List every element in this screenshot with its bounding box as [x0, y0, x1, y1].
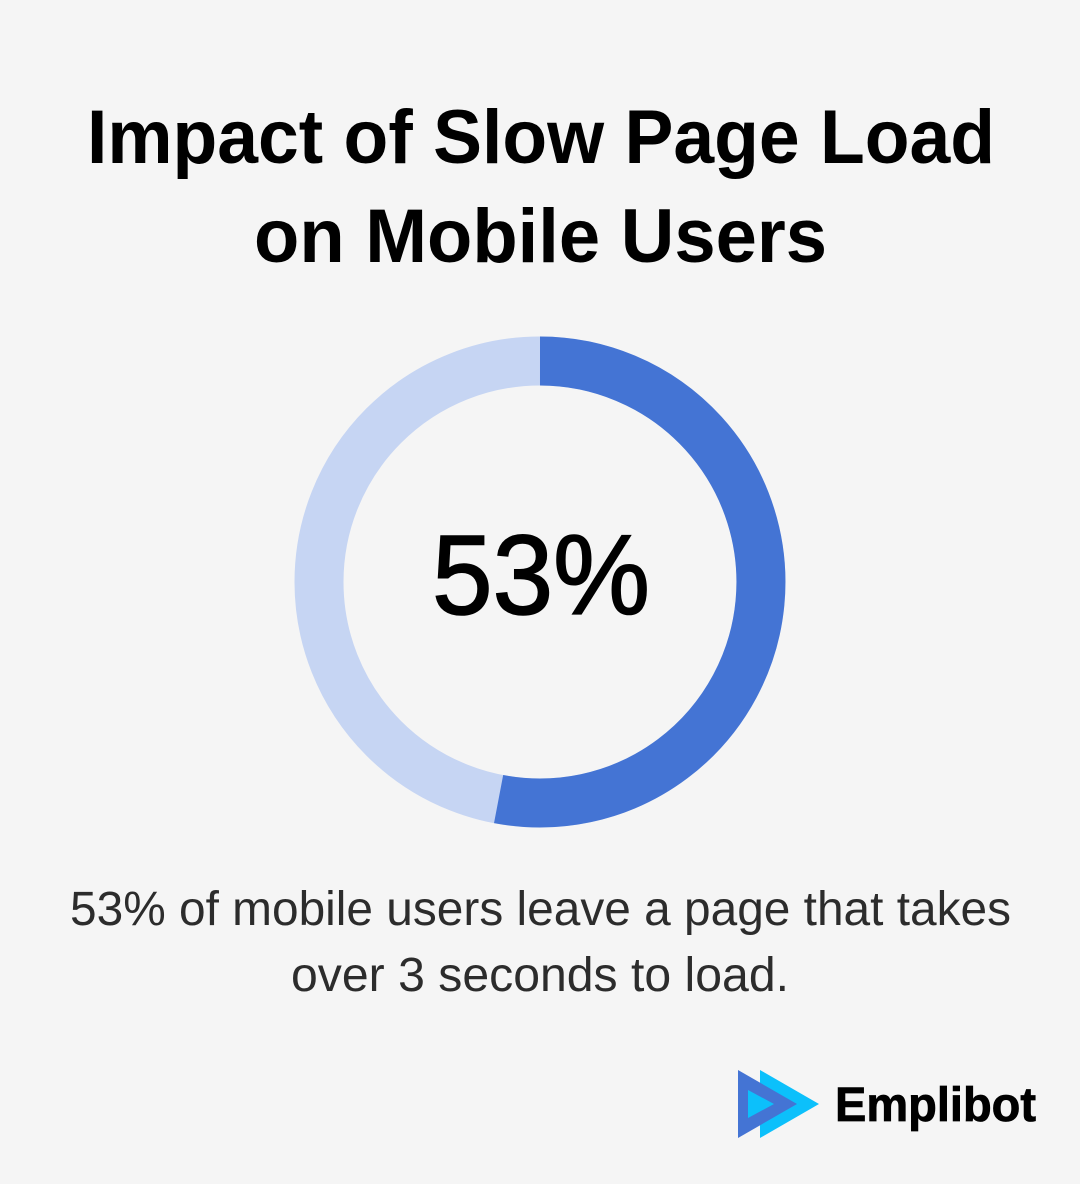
icon: play triangles	[738, 1070, 819, 1138]
donut chart: 53%	[319, 361, 761, 803]
donut track	[319, 361, 761, 803]
title: on Mobile Users	[254, 194, 827, 279]
description text: over 3 seconds to load.	[291, 949, 789, 1002]
logo wordmark: Emplibot	[835, 1079, 1036, 1132]
donut value arc	[499, 361, 761, 803]
description text: 53% of mobile users leave a page that takes	[70, 883, 1011, 936]
title: Impact of Slow Page Load	[87, 95, 995, 180]
big percentage: 53%	[432, 512, 650, 638]
title	[87, 95, 995, 279]
logo: Emplibot	[738, 1070, 1036, 1138]
description text	[70, 883, 1011, 1002]
